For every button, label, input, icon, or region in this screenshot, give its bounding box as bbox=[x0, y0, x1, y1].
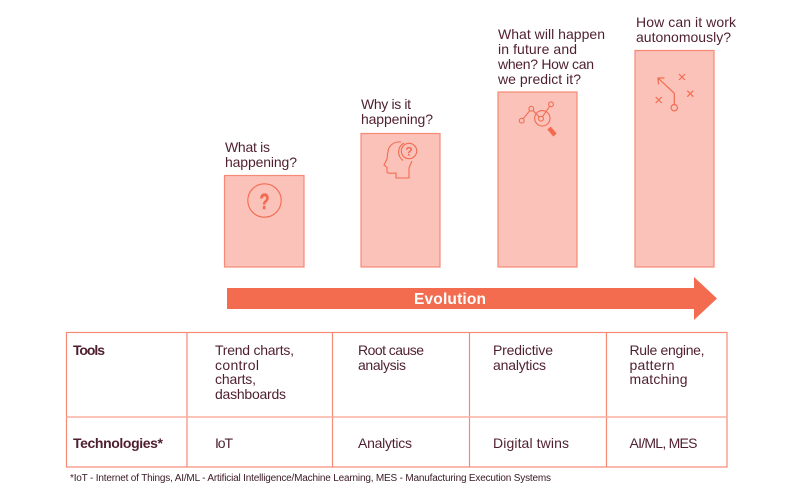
panel: what will happen bbox=[497, 26, 605, 267]
panel: why is it happening bbox=[361, 96, 440, 267]
icon: question mark: ? bbox=[260, 189, 270, 214]
heading: what will happen: when? How can bbox=[497, 56, 594, 72]
table grid bbox=[66, 332, 727, 467]
row heading: technologies: Technologies* bbox=[73, 435, 164, 451]
heading: what is happening: happening? bbox=[225, 154, 297, 170]
arrow: evolution bbox=[227, 277, 717, 320]
icon: strategy play bbox=[656, 74, 693, 111]
heading: why is it happening: Why is it bbox=[361, 96, 411, 112]
cell: rule engine: pattern bbox=[630, 357, 674, 373]
row heading: tools: Tools bbox=[73, 342, 105, 358]
cell: trend charts: charts, bbox=[215, 371, 256, 387]
cell: analytics: Analytics bbox=[358, 435, 412, 451]
icon: chart with magnifier bbox=[519, 102, 555, 135]
cell: root cause analysis: Root cause bbox=[358, 342, 424, 358]
heading: why is it happening: happening? bbox=[361, 111, 433, 127]
cell: trend charts: Trend charts, bbox=[215, 342, 294, 358]
table: tools and technologies bbox=[66, 332, 727, 467]
cell: digital twins: Digital twins bbox=[493, 435, 569, 451]
footnote: *IoT - Internet of Things, AI/ML - Artificial Intelligence/Machine Learning, MES - Manufacturing Execution Systems bbox=[70, 473, 551, 484]
bar: stage 1 bbox=[224, 176, 304, 267]
arrow: evolution: Evolution bbox=[414, 291, 486, 308]
bar: stage 4 bbox=[635, 50, 714, 267]
cell: predictive analytics: Predictive bbox=[493, 342, 553, 358]
cell: iot: IoT bbox=[215, 435, 233, 451]
heading: what will happen: What will happen bbox=[498, 26, 605, 42]
cell: rule engine: matching bbox=[630, 371, 688, 387]
bar: stage 3 bbox=[498, 92, 577, 267]
cell: root cause analysis: analysis bbox=[358, 357, 406, 373]
heading: what will happen: we predict it? bbox=[497, 71, 581, 87]
heading: how can it work: How can it work bbox=[636, 14, 737, 30]
panel: how can it work bbox=[635, 14, 737, 267]
cell: rule engine: Rule engine, bbox=[630, 342, 704, 358]
heading: what is happening: What is bbox=[225, 139, 270, 155]
heading: what will happen: in future and bbox=[498, 41, 577, 57]
icon: head with question mark: ? bbox=[405, 144, 413, 158]
cell: trend charts: dashboards bbox=[215, 386, 286, 402]
cell: predictive analytics: analytics bbox=[493, 357, 546, 373]
cell: trend charts: control bbox=[215, 357, 259, 373]
bar: stage 2 bbox=[361, 134, 440, 267]
heading: how can it work: autonomously? bbox=[636, 29, 731, 45]
icon: head with question mark bbox=[384, 142, 417, 178]
cell: ai/ml, mes: AI/ML, MES bbox=[630, 435, 698, 451]
panel: what is happening bbox=[224, 139, 304, 267]
